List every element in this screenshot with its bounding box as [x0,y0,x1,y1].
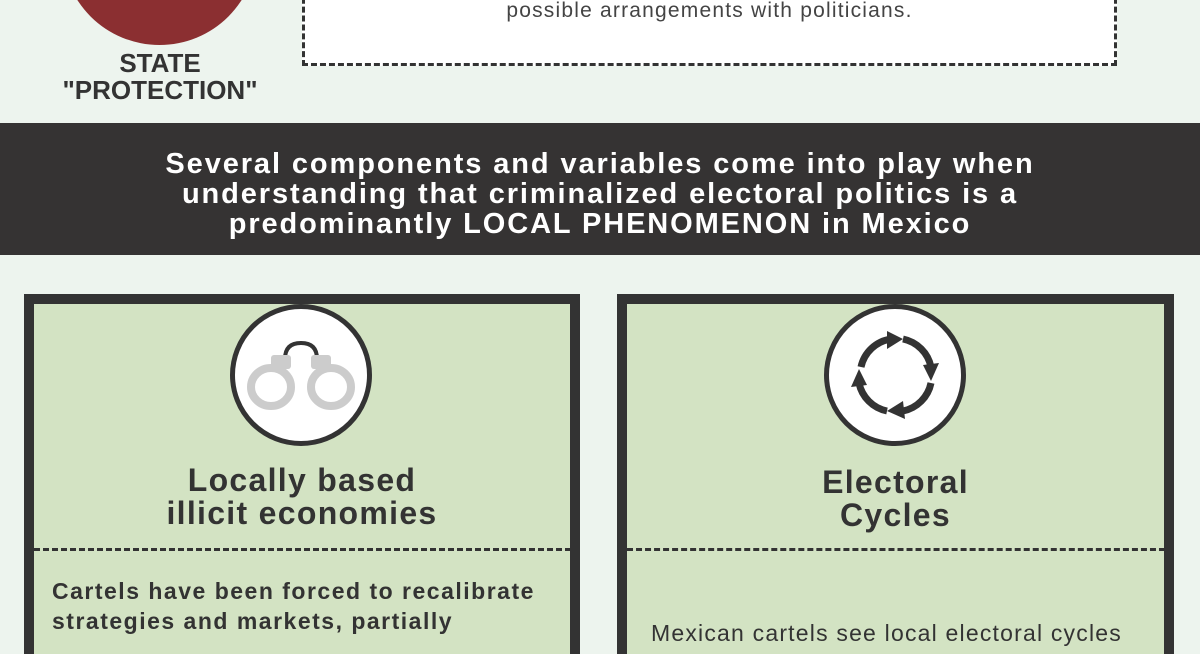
panel title [822,464,969,533]
panel body text: Mexican cartels see local electoral cycles [651,620,1122,646]
panel: locally based illicit economies [24,294,580,654]
banner text: predominantly LOCAL PHENOMENON in Mexico [229,208,971,240]
icon: red circle [62,0,257,45]
panel title: illicit economies [166,495,438,531]
label: state protection: STATE [119,48,201,78]
label: state protection [62,48,258,105]
banner text: Several components and variables come into play when [165,148,1035,180]
icon: cycle arrows [824,304,966,446]
panel title: Cycles [840,497,951,533]
icon: handcuffs [230,304,372,446]
panel body text: Cartels have been forced to recalibrate [52,578,535,604]
dashed text box [302,0,1117,66]
panel: electoral cycles [617,294,1174,654]
banner text: understanding that criminalized electoral politics is a [182,178,1018,210]
banner text [165,148,1035,240]
panel title [166,462,438,531]
panel title: Electoral [822,464,969,500]
label: state protection: "PROTECTION" [62,75,258,105]
panel title: Locally based [188,462,416,498]
banner [0,123,1200,255]
panel body text [52,578,535,634]
panel body text: strategies and markets, partially [52,608,453,634]
